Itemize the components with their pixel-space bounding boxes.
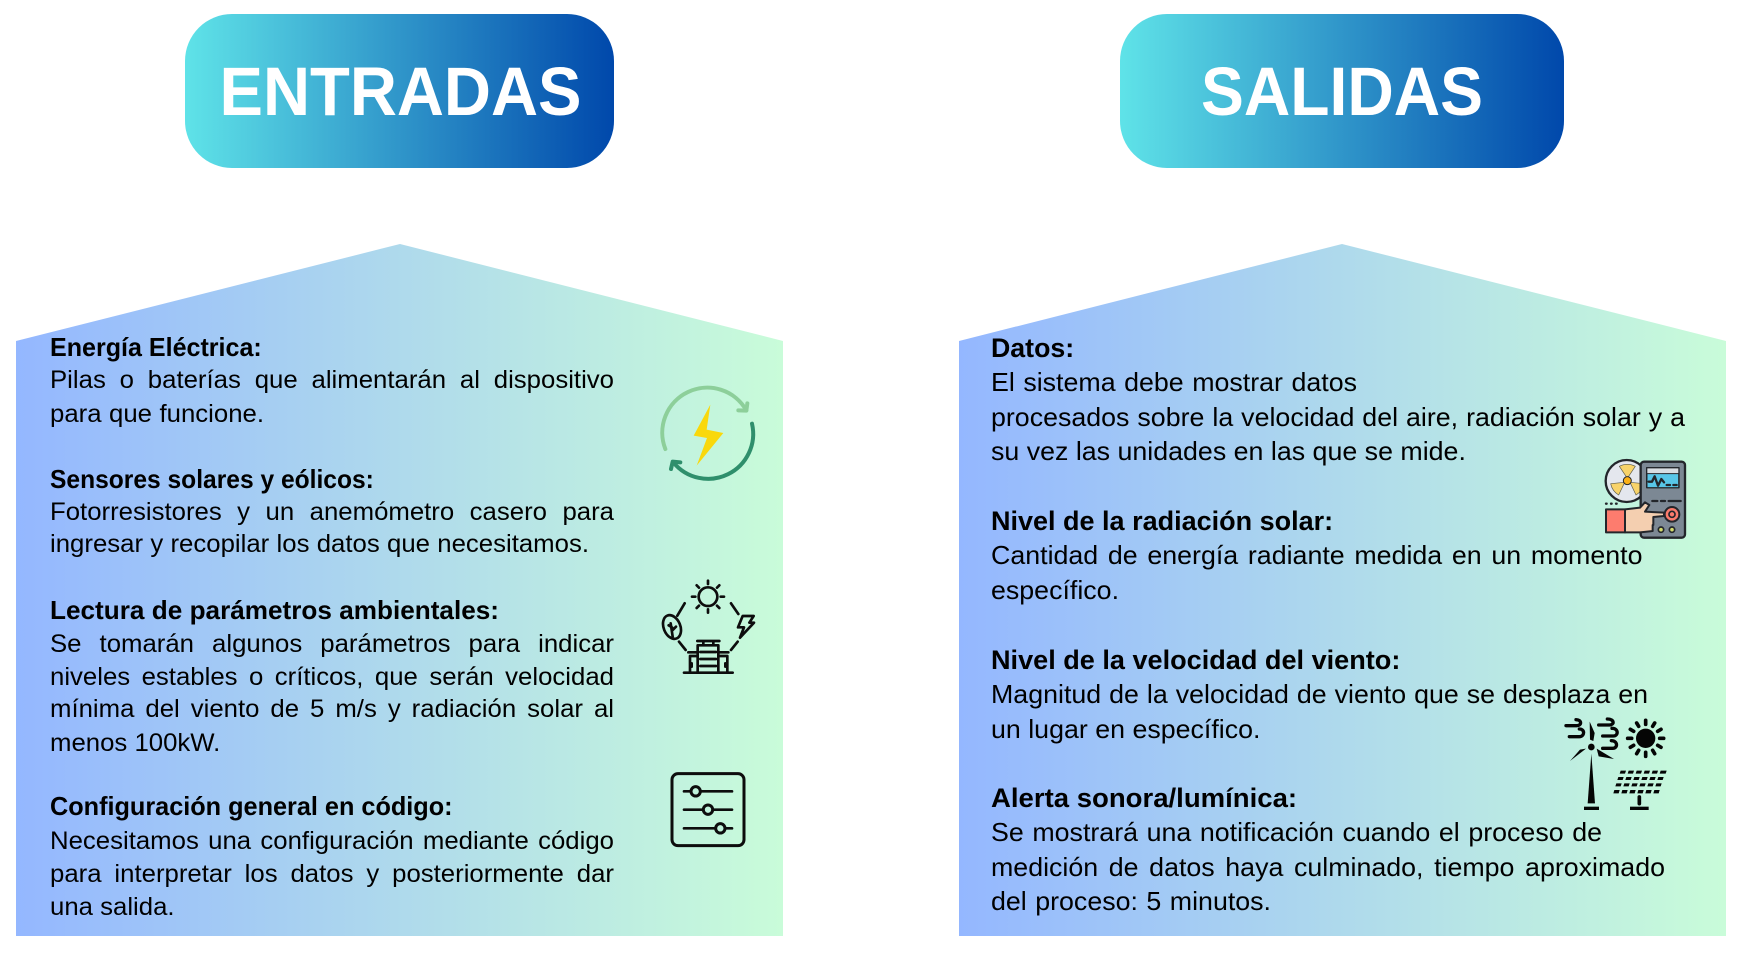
heading pill: ENTRADAS: ENTRADAS xyxy=(219,53,581,130)
text block: Lectura de parámetros ambientales xyxy=(50,595,614,757)
heading pill: SALIDAS: SALIDAS xyxy=(1201,53,1483,130)
panel: entradas: mínima del viento de 5 m/s y radiación solar al xyxy=(50,695,614,723)
panel: entradas: Lectura de parámetros ambientales: xyxy=(50,595,499,625)
panel: entradas: Fotorresistores y un anemómetro casero para xyxy=(50,498,614,526)
panel: salidas: su vez las unidades en las que se mide. xyxy=(991,436,1466,466)
panel: entradas: Pilas o baterías que alimentarán al dispositivo xyxy=(50,366,614,394)
panel: salidas: del proceso: 5 minutos. xyxy=(991,886,1271,916)
text block: Configuración general en código xyxy=(50,791,614,921)
panel: salidas: Magnitud de la velocidad de viento que se desplaza en xyxy=(991,678,1648,708)
panel: salidas: procesados sobre la velocidad del aire, radiación solar y a xyxy=(991,402,1685,432)
panel: salidas: El sistema debe mostrar datos xyxy=(991,367,1357,397)
panel: salidas xyxy=(959,244,1726,936)
panel: entradas: niveles estables o críticos, que serán velocidad xyxy=(50,662,614,690)
panel: entradas: Se tomarán algunos parámetros para indicar xyxy=(50,630,614,658)
icon: settings sliders xyxy=(670,772,746,848)
panel: salidas: Cantidad de energía radiante medida en un momento xyxy=(991,540,1642,570)
panel: entradas: para interpretar los datos y posteriormente dar xyxy=(50,860,614,888)
panel: salidas: un lugar en específico. xyxy=(991,714,1260,744)
text block: Energía Eléctrica xyxy=(50,332,614,428)
panel: entradas: Necesitamos una configuración mediante código xyxy=(50,827,614,855)
text block: Nivel de la velocidad del viento xyxy=(991,644,1648,744)
text block: Alerta sonora/lumínica xyxy=(991,783,1665,916)
text block: Sensores solares y eólicos xyxy=(50,464,614,558)
panel: salidas: específico. xyxy=(991,574,1119,604)
text block: Nivel de la radiación solar xyxy=(991,506,1642,604)
panel: salidas: medición de datos haya culminado, tiempo aproximado xyxy=(991,852,1665,882)
panel: salidas: Alerta sonora/lumínica: xyxy=(991,783,1297,813)
panel: entradas: Configuración general en código: xyxy=(50,791,453,821)
panel: salidas: Se mostrará una notificación cuando el proceso de xyxy=(991,816,1602,846)
heading pill: ENTRADAS xyxy=(184,14,614,168)
heading pill: SALIDAS xyxy=(1120,14,1564,168)
panel: entradas: una salida. xyxy=(50,893,175,921)
text block: Datos xyxy=(991,333,1685,466)
panel: entradas: ingresar y recopilar los datos que necesitamos. xyxy=(50,530,589,558)
panel: salidas: Nivel de la velocidad del viento: xyxy=(991,644,1400,674)
panel: entradas: para que funcione. xyxy=(50,400,264,428)
icon: radiation meter with hand xyxy=(1604,458,1686,539)
panel: salidas: Nivel de la radiación solar: xyxy=(991,506,1333,536)
icon: wind turbine, sun and solar panel xyxy=(1564,717,1667,810)
panel: entradas: Energía Eléctrica: xyxy=(50,332,262,362)
panel: entradas xyxy=(16,244,783,936)
icon: sun, leaf, bolt and building cycle xyxy=(662,579,756,674)
panel: entradas: Sensores solares y eólicos: xyxy=(50,464,374,494)
panel: salidas: Datos: xyxy=(991,333,1074,363)
icon: energy cycle with lightning bolt xyxy=(660,386,756,481)
panel: entradas: menos 100kW. xyxy=(50,729,220,757)
